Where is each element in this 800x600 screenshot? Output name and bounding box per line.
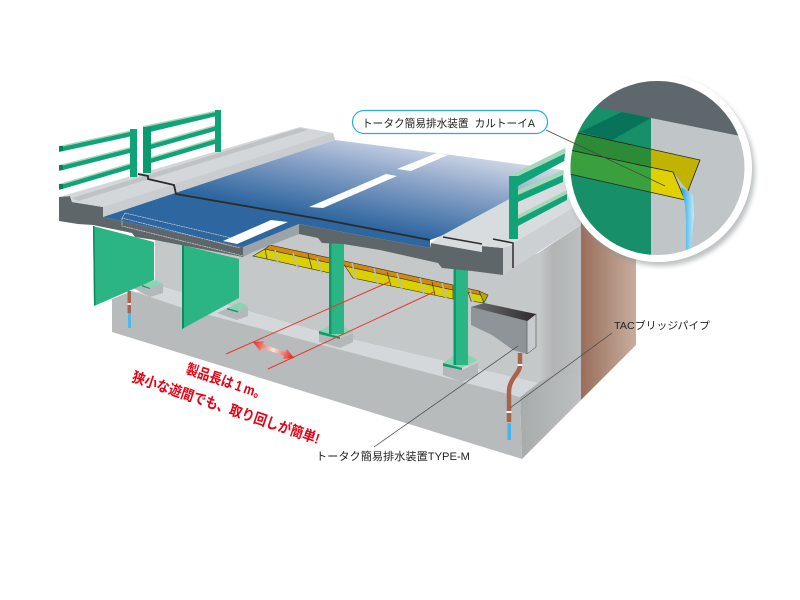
kerb raised strip bbox=[72, 128, 308, 201]
right slab side face bbox=[513, 203, 581, 268]
detail falling water bbox=[681, 187, 694, 250]
label: Karutoi A bbox=[352, 110, 548, 134]
hidden gutter outline under deck bbox=[122, 213, 243, 256]
leader line to Karutoi A bbox=[546, 130, 665, 186]
pier right base bbox=[443, 355, 478, 382]
right railing bbox=[509, 148, 567, 239]
circle white ring bbox=[564, 74, 752, 262]
right kerb top bbox=[431, 170, 600, 252]
label: Karutoi A: トータク簡易排水装置 カルトーイA bbox=[362, 116, 536, 130]
left railing 2 bbox=[143, 110, 221, 173]
double arrow: one metre span bbox=[253, 341, 294, 359]
left drain pipe bbox=[128, 291, 131, 328]
far beam wedge bbox=[243, 224, 299, 257]
water drip from gutter bbox=[484, 302, 487, 313]
blue road surface bbox=[103, 140, 563, 248]
detail gutter front bbox=[565, 149, 651, 193]
deck left end face bbox=[59, 196, 243, 257]
brown earth wall bbox=[581, 215, 636, 400]
detail gutter back bbox=[570, 132, 651, 168]
callout line 1: 製品長は 1 m。 bbox=[184, 361, 269, 404]
lane markings bbox=[223, 153, 448, 244]
girder panel right bbox=[182, 245, 239, 329]
pier middle base bbox=[319, 326, 353, 348]
back wall bbox=[155, 230, 538, 383]
red product length lines bbox=[226, 282, 434, 369]
gutter section dividers bbox=[265, 249, 435, 295]
abutment side wall upper bbox=[538, 225, 581, 400]
expansion joint line bbox=[138, 174, 430, 240]
bearing block left bbox=[133, 280, 163, 297]
red callout text bbox=[130, 361, 322, 448]
bearing block middle bbox=[217, 302, 248, 320]
right slab end face bbox=[503, 244, 513, 275]
circle shadow bbox=[567, 78, 755, 266]
pier right column bbox=[454, 268, 468, 365]
drain box TYPE-M bbox=[471, 303, 536, 354]
left kerb bbox=[59, 127, 335, 217]
label: TAC bridge pipe: TACブリッジパイプ bbox=[614, 319, 711, 332]
green steel girder panels bbox=[93, 226, 248, 329]
callout line 2: 狭小な遊間でも、取り回しが簡単! bbox=[130, 368, 322, 448]
right joint segments bbox=[443, 237, 513, 268]
pier middle column bbox=[329, 243, 344, 334]
girder panel left bbox=[93, 226, 154, 306]
far beam fascia bbox=[299, 224, 503, 275]
leader line to TAC bridge pipe bbox=[510, 333, 612, 408]
leader line to TYPE-M bbox=[374, 346, 518, 447]
abutment side face lower bbox=[520, 375, 581, 459]
left railing 1 bbox=[59, 129, 137, 190]
kerb inner face bbox=[103, 133, 335, 217]
yellow gutter drain (Karutoi A) bbox=[253, 245, 488, 303]
ground block front face bbox=[112, 291, 522, 459]
label: TYPE-M: トータク簡易排水装置TYPE-M bbox=[316, 449, 470, 463]
gutter brackets bbox=[275, 250, 473, 302]
magnified detail circle bbox=[564, 74, 755, 266]
detail gutter outlines bbox=[565, 133, 700, 200]
ground ledge top bbox=[133, 287, 538, 397]
bridge deck bbox=[59, 127, 600, 275]
steel piers bbox=[319, 243, 478, 382]
right drain pipe bbox=[506, 353, 522, 440]
circle contents bbox=[565, 75, 750, 256]
bridge abutment and ground block bbox=[112, 215, 636, 459]
